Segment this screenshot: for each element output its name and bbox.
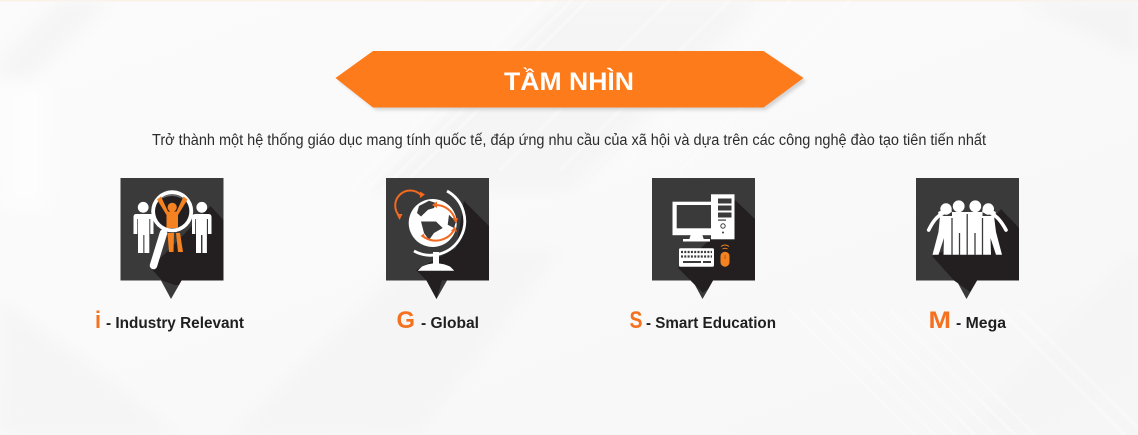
panel: Mega (916, 178, 1019, 334)
label (630, 307, 776, 334)
icon: group of people (929, 200, 1006, 255)
title ribbon (336, 51, 806, 110)
marker: icon box (652, 178, 755, 299)
label: - Smart Education (646, 315, 776, 332)
icon: computer (672, 194, 734, 267)
label (396, 307, 479, 334)
marker: icon box (916, 178, 1019, 299)
icon: people under magnifier (134, 190, 212, 266)
panel: Global (386, 178, 489, 334)
label: M (928, 307, 951, 334)
panel: Smart Education (630, 178, 776, 334)
label (95, 307, 244, 334)
label (928, 307, 1006, 334)
heading: TẦM NHÌN (504, 67, 634, 96)
label: S (630, 307, 642, 334)
marker: icon box (386, 178, 489, 299)
label: - Mega (956, 315, 1006, 332)
label: i (95, 307, 101, 334)
subtitle text: Trở thành một hệ thống giáo dục mang tính quốc tế, đáp ứng nhu cầu của xã hội và dựa trên các công nghệ đào tạo tiên tiến nhất (152, 132, 987, 149)
icon: globe (395, 190, 465, 271)
marker: icon box (120, 178, 224, 299)
label: - Global (421, 315, 479, 332)
label: G (396, 307, 415, 334)
label: - Industry Relevant (106, 315, 244, 332)
panel: Industry Relevant (95, 178, 244, 334)
